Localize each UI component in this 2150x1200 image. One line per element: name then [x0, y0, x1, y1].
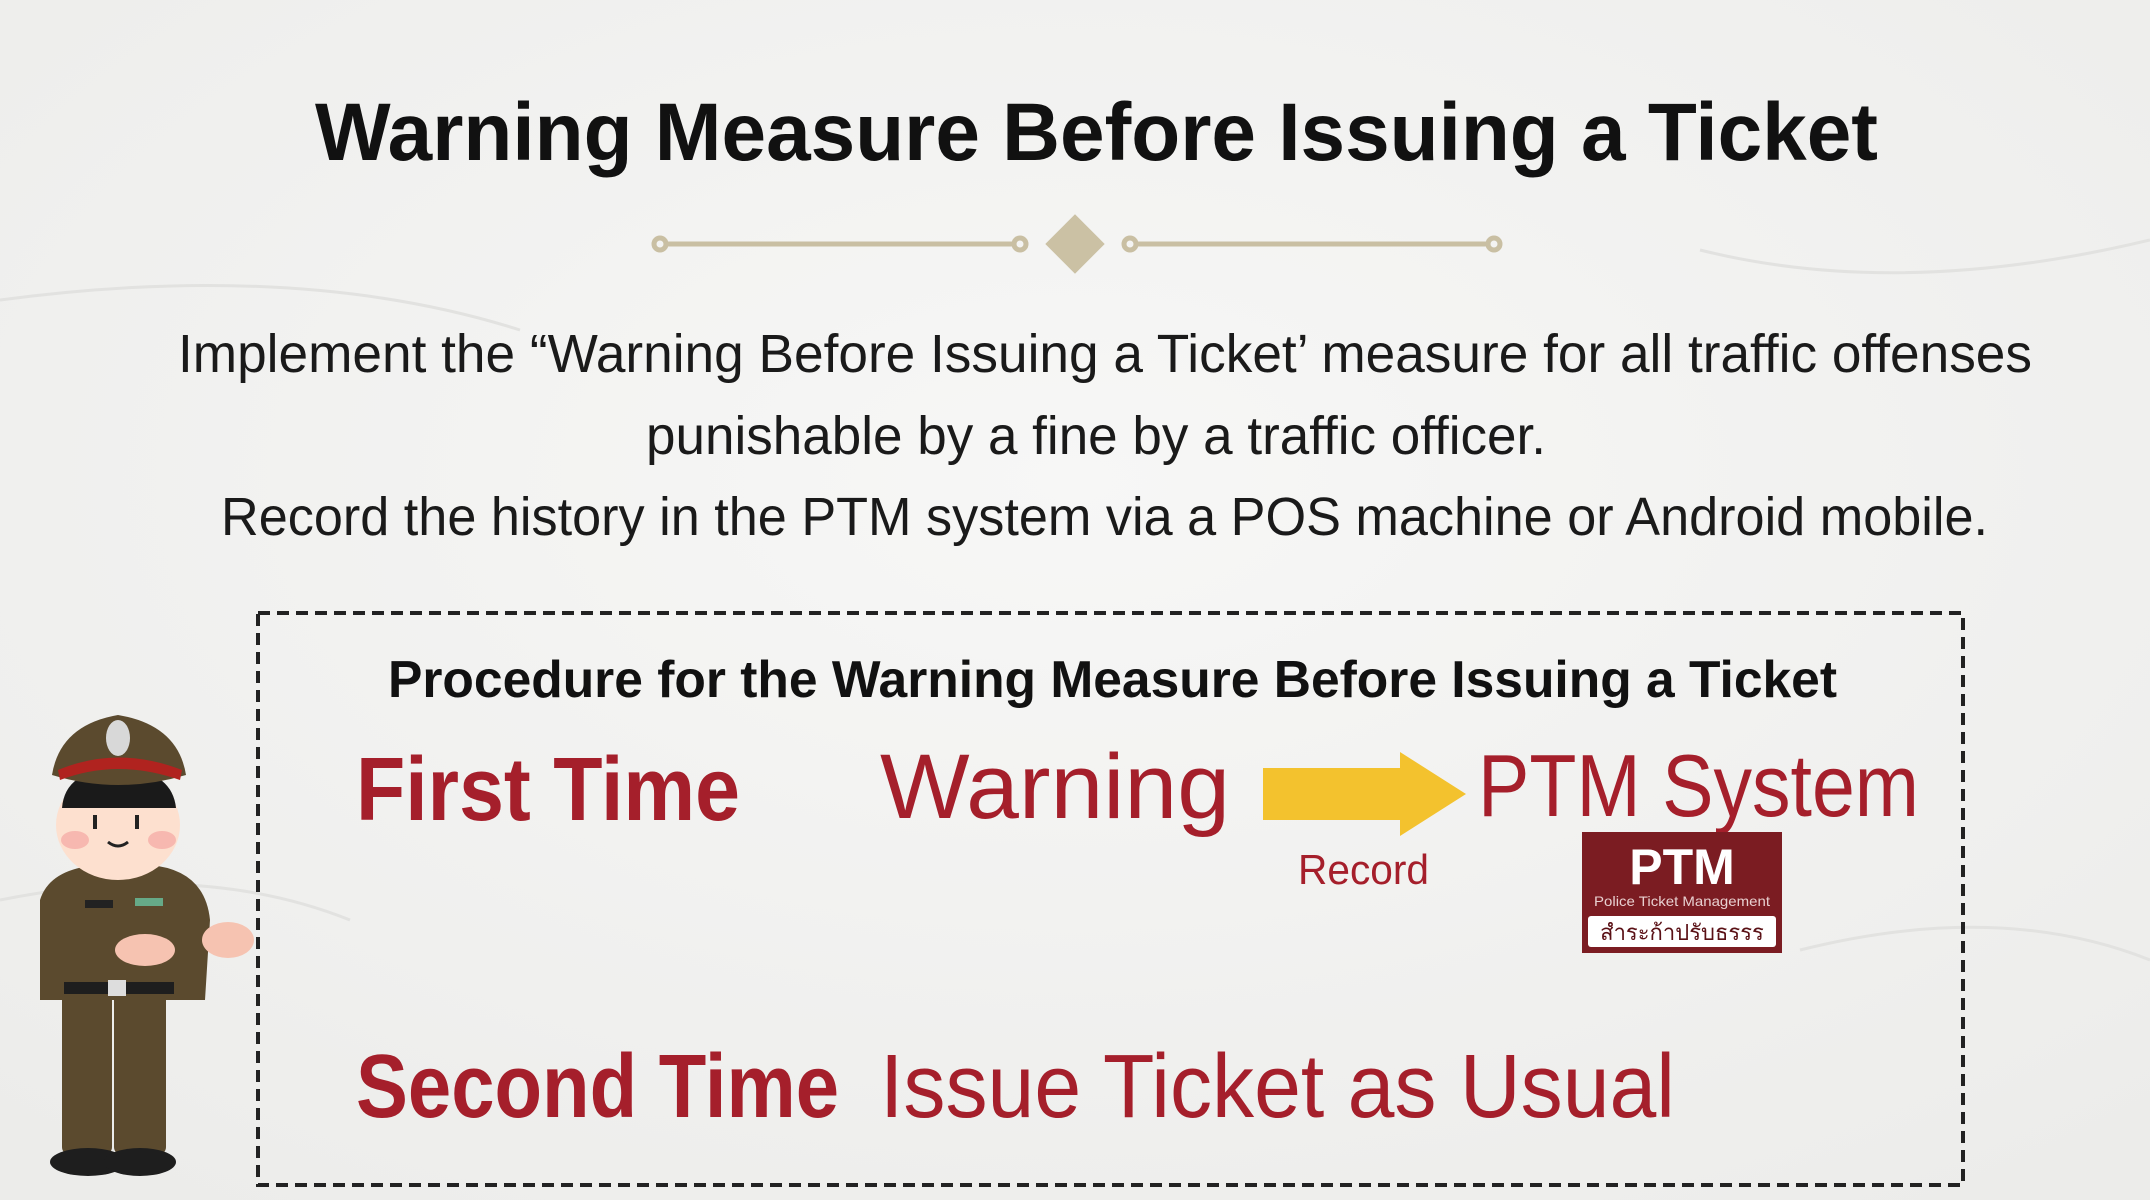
PTM system text: PTM System [1478, 736, 1919, 835]
procedure panel [258, 613, 1963, 1185]
title: Warning Measure Before Issuing a Ticket [315, 87, 1878, 178]
icon: police officer [40, 715, 254, 1176]
arrow: record [1263, 752, 1466, 836]
divider ornament [654, 214, 1500, 274]
first time label: First Time [356, 740, 740, 840]
warning text: Warning [880, 736, 1230, 838]
intro paragraph: Record the history in the PTM system via a POS machine or Android mobile. [221, 487, 1988, 547]
PTM logo [1582, 832, 1782, 953]
hat [52, 715, 186, 785]
PTM logo: สำระก้าปรับธรรร [1600, 920, 1764, 945]
second time label: Second Time [356, 1037, 839, 1137]
body [40, 865, 210, 1000]
record label: Record [1298, 846, 1429, 893]
issue ticket text: Issue Ticket as Usual [880, 1037, 1675, 1137]
intro paragraph: punishable by a fine by a traffic officer. [646, 406, 1546, 466]
face [56, 770, 180, 880]
PTM logo: PTM [1629, 839, 1735, 895]
intro paragraph: Implement the “Warning Before Issuing a Ticket’ measure for all traffic offenses [178, 324, 2032, 384]
legs [62, 990, 112, 1155]
intro paragraph [178, 324, 2032, 547]
PTM logo: Police Ticket Management [1594, 893, 1770, 909]
hands [115, 934, 175, 966]
panel heading: Procedure for the Warning Measure Before Issuing a Ticket [388, 651, 1837, 709]
